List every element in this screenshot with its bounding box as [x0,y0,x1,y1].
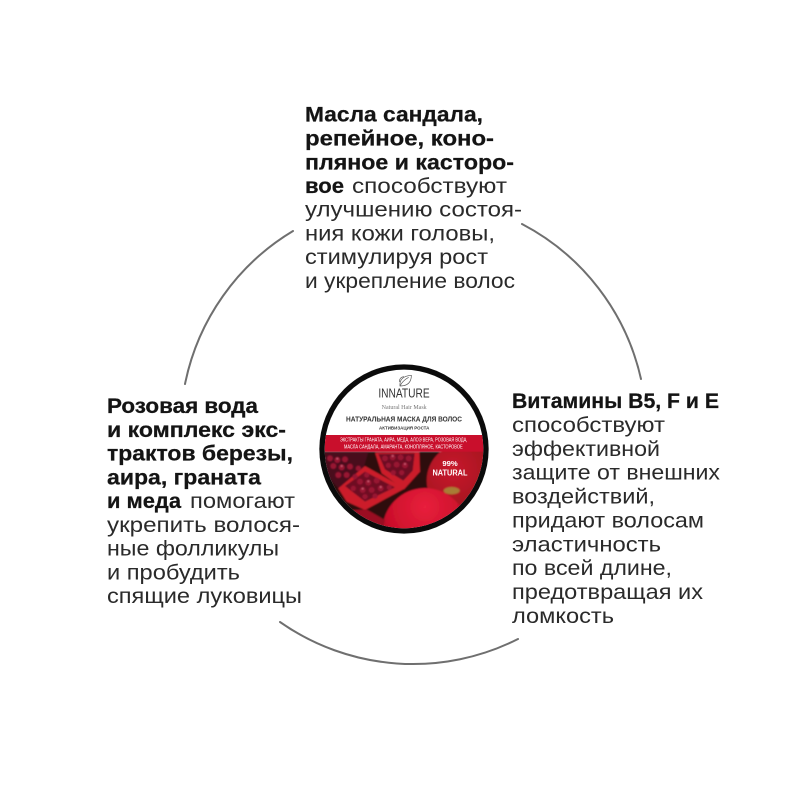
body: rose water: укрепить волося- [107,514,300,537]
infographic canvas [107,106,720,665]
body: rose water: ные фолликулы [107,538,279,560]
badge: 99% natural [432,461,468,476]
text block: rose water [107,395,302,608]
text block: oils [305,104,522,293]
badge: 99% natural: 99% [442,459,458,468]
heading: oils: Масла сандала, [305,104,483,126]
heading: oils: пляное и касторо- [305,151,514,174]
body: vitamins: воздействий, [512,486,655,509]
heading: rose water: и комплекс экс- [107,419,286,442]
heading: oils: вое [305,175,344,198]
body: vitamins: придают волосам [512,509,704,532]
body: vitamins [512,414,721,628]
body: vitamins: ломкость [512,605,614,628]
body: oils: улучшению состоя- [305,198,522,222]
body: vitamins: способствуют [512,414,665,437]
body: vitamins: защите от внешних [512,462,721,485]
heading: oils: репейное, коно- [305,128,494,150]
jar label [324,370,484,528]
arc: bottom [280,622,518,664]
body: vitamins: по всей длине, [512,557,672,580]
icon: leaf logo [399,375,411,386]
product name: НАТУРАЛЬНАЯ МАСКА ДЛЯ ВОЛОС [346,414,462,423]
heading: rose water: аира, граната [107,466,261,489]
badge: 99% natural: NATURAL [432,469,468,478]
heading: vitamins: Витамины B5, F и E [512,390,719,413]
body: oils: способствуют [352,175,507,198]
ingredient list: ЭКСТРАКТЫ ГРАНАТА, АИРА, МЕДА, АЛОЭ ВЕРА, РОЗОВАЯ ВОДА, [340,438,467,444]
arc: top right [522,224,641,379]
product purpose: АКТИВИЗАЦИЯ РОСТА [379,426,430,432]
body: oils: стимулируя рост [305,246,488,269]
brand name: INNATURE [378,386,430,400]
product subtitle: Natural Hair Mask [382,405,427,411]
body: vitamins: предотвращая их [512,581,704,604]
product jar [319,364,489,534]
body: oils: ния кожи головы, [305,222,495,246]
arc: top left [185,231,293,384]
body: rose water: помогают [190,490,295,513]
heading: rose water: Розовая вода [107,395,258,418]
body: oils [305,175,522,293]
ingredient list [340,438,467,450]
body: rose water: спящие луковицы [107,585,302,608]
body: rose water [107,490,302,608]
ingredient list: МАСЛА САНДАЛА, АМАРАНТА, КОНОПЛЯНОЕ, КАСТОРОВОЕ [344,444,463,450]
text block: vitamins [512,390,721,628]
body: vitamins: эффективной [512,438,660,461]
heading: rose water [107,395,293,513]
body: vitamins: эластичность [512,533,661,556]
body: oils: и укрепление волос [305,270,515,293]
heading: rose water: трактов березы, [107,442,293,466]
red ingredient band [320,435,490,452]
heading: oils [305,104,514,198]
jar rim [319,364,489,534]
body: rose water: и пробудить [107,561,240,584]
product photo: pomegranates [324,448,484,528]
heading: rose water: и меда [107,490,181,513]
